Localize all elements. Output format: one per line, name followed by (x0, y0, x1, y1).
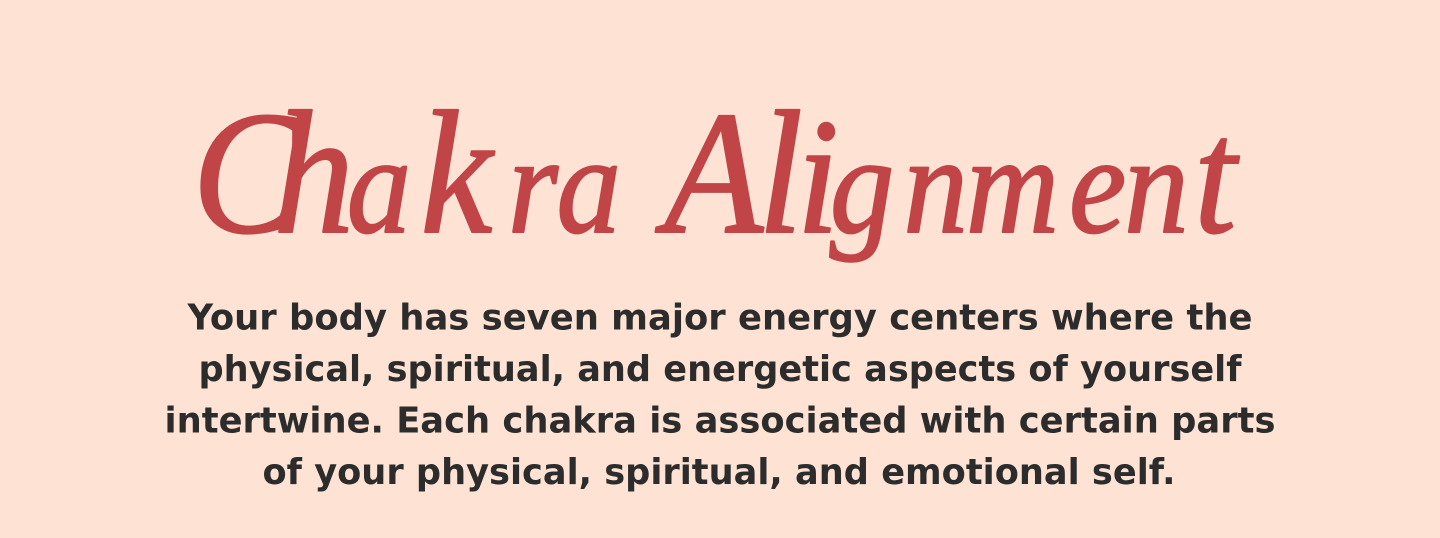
title: k (420, 75, 495, 271)
title: r (508, 108, 559, 263)
intro text block (164, 298, 1276, 493)
title: a (347, 108, 411, 263)
title: A (655, 75, 764, 271)
title: i (797, 86, 839, 268)
title: n (903, 108, 968, 263)
title: C (192, 75, 302, 271)
intro text block: intertwine. Each chakra is associated with certain parts (164, 400, 1276, 442)
title: g (830, 108, 894, 263)
title: l (758, 75, 803, 271)
intro text block: physical, spiritual, and energetic aspects of yourself (198, 349, 1242, 390)
title: e (1069, 108, 1126, 263)
title: t (1194, 86, 1240, 268)
title: h (273, 75, 354, 271)
title: m (966, 108, 1059, 263)
title: n (1124, 108, 1189, 263)
intro text block: Your body has seven major energy centers where the (187, 298, 1252, 338)
intro text block: of your physical, spiritual, and emotional self. (262, 452, 1176, 493)
title: a (557, 108, 621, 263)
